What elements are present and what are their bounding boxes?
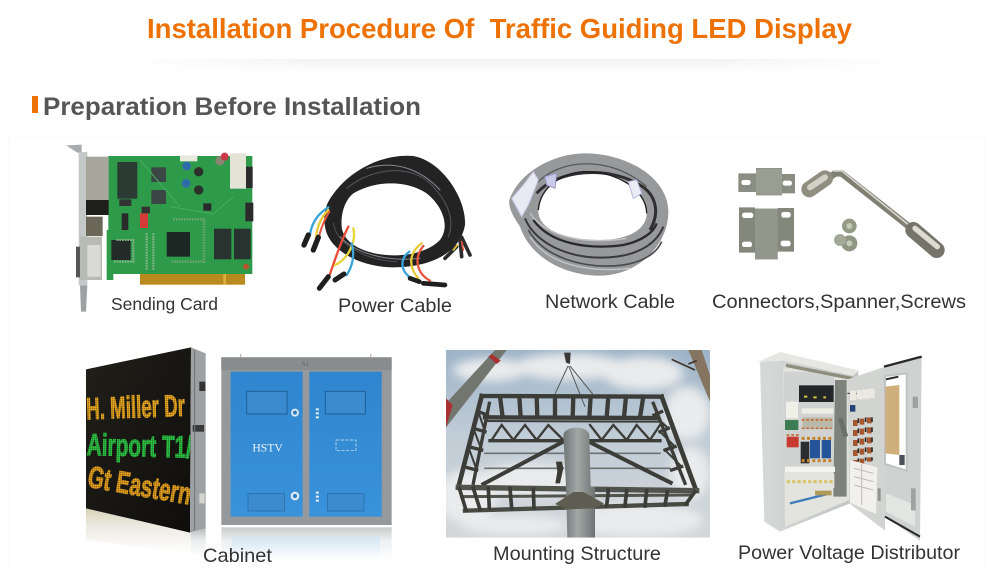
blue door left [231, 372, 303, 517]
pole flange [555, 492, 604, 509]
LED messages: H. Miller Dr [86, 389, 186, 426]
item: power cable [304, 156, 470, 317]
pole [563, 428, 595, 538]
label: Power Voltage Distributor [738, 542, 961, 564]
LED messages: Gt Eastern [85, 460, 194, 512]
crane arm [446, 350, 507, 427]
cabinet logo: HSTV [252, 442, 283, 455]
section heading: preparation before installation [32, 93, 421, 121]
label: Mounting Structure [493, 544, 661, 565]
icon: connector brackets, spanner and screws photo [738, 168, 937, 259]
label: Power Cable [338, 295, 452, 317]
tree [688, 350, 710, 402]
title: Installation Procedure Of Traffic Guiding LED Display [147, 13, 852, 44]
panel outline [8, 136, 984, 572]
panel: equipment list [66, 144, 966, 564]
item: sending card [66, 145, 253, 314]
LED messages: Airport T1/ [86, 428, 193, 465]
cabinet body [760, 353, 858, 532]
hook and slings [564, 353, 571, 364]
icon: LED module and blue cabinet back photo [85, 347, 392, 561]
heading text: Preparation Before Installation [43, 93, 421, 121]
cabinet side [190, 347, 206, 533]
label: Network Cable [545, 292, 675, 313]
icon: steel frame on pole photo [437, 350, 710, 538]
blue door right [309, 372, 382, 517]
worker [555, 462, 563, 483]
label: Sending Card [111, 294, 218, 314]
item: connectors, spanner, screws [712, 168, 966, 313]
label: Connectors,Spanner,Screws [712, 291, 966, 313]
heading accent bar [32, 96, 38, 113]
outer door [885, 357, 922, 541]
LED messages [85, 389, 194, 512]
inner door [847, 367, 885, 531]
item: mounting structure [437, 350, 710, 565]
icon: network cable photo [509, 153, 668, 276]
reflections [86, 508, 191, 553]
truss frame [458, 396, 697, 511]
title underline shadow [125, 59, 905, 73]
icon: LED module and blue cabinet back photo: A2 [301, 361, 309, 367]
item: power voltage distributor [738, 352, 961, 564]
cabinet back frame [221, 357, 392, 525]
item: network cable [509, 153, 675, 313]
label: Cabinet [203, 545, 273, 567]
icon: sending card photo [66, 145, 253, 312]
interior [783, 367, 849, 527]
item: cabinet [85, 347, 392, 567]
icon: open electrical cabinet photo [757, 352, 922, 541]
LED screen face [86, 347, 191, 533]
icon: power cable photo [304, 156, 470, 288]
